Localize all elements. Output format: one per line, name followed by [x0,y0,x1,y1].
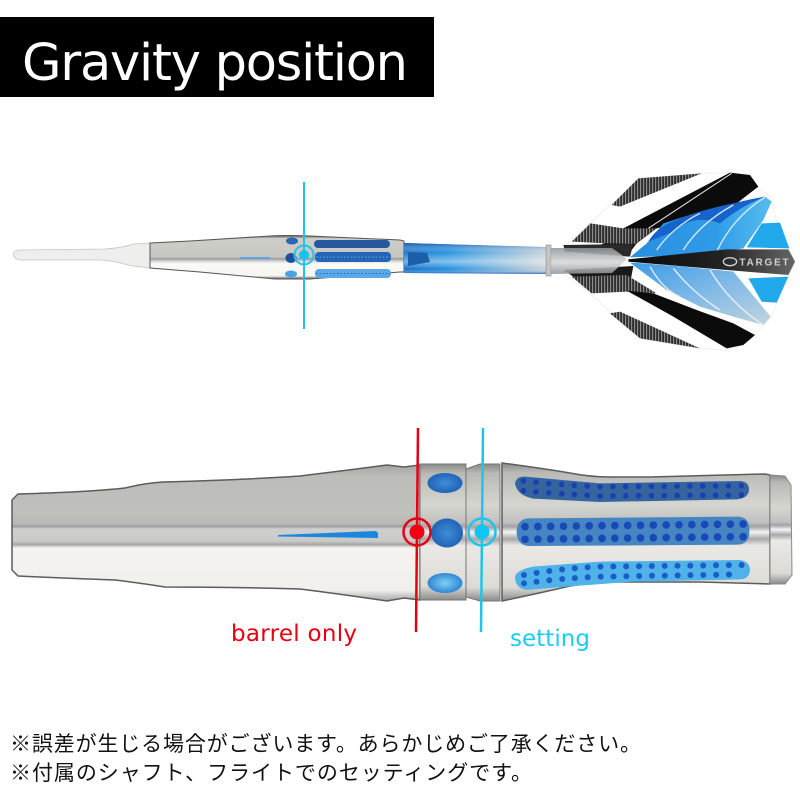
carbon lower mid strip [572,275,657,293]
small full dart [13,173,795,350]
carbon lower strip [610,312,700,348]
upper feathers [630,197,772,257]
large barrel close-up [12,463,792,601]
flight, drawn in 3x coordinates [560,173,795,350]
chevron band upper [563,244,633,257]
carbon upper strip [612,173,702,207]
chevron band lower [563,266,633,284]
lower feathers [630,263,771,325]
centre black strip [628,249,795,275]
footnote line 2: ※付属のシャフト、フライトでのセッティングです。 [10,762,532,785]
oval bottom [428,573,462,593]
shaft shine [404,243,546,274]
grip pits in 3x coordinates [515,477,750,590]
title [0,17,434,97]
shaft ring [546,245,551,276]
blue groove line [278,531,378,538]
oval top [428,473,462,493]
barrel only marker [404,428,430,632]
centre ring section [420,464,466,600]
grip section [502,463,770,601]
middle pit [517,517,749,546]
shaft [404,243,546,274]
label: setting: setting [510,626,590,652]
logo mark [723,258,737,266]
upper feather dark edge [648,197,765,242]
front barrel section [12,465,420,601]
black upper band [600,173,758,257]
bottom pit [515,560,750,590]
lower blue block [748,277,788,303]
dart tip [13,243,150,268]
small barrel grooves [240,238,391,278]
carbon mid strip [572,223,657,244]
upper blue block [747,223,789,248]
upper band white line [648,173,732,228]
flight body [560,173,795,350]
collar [466,464,500,601]
label: barrel only: barrel only [231,621,357,647]
upper feather veins [657,197,765,252]
black lower band [627,291,755,348]
footnotes [10,732,641,785]
setting marker [468,428,496,632]
small dart gravity marker [294,182,314,329]
top pit [515,477,749,502]
rear collar [770,475,792,584]
title: Gravity position [22,34,408,93]
shaft stem [551,248,626,274]
shaft logo [408,252,430,266]
lower feather veins [650,267,763,325]
small barrel [150,236,404,279]
footnote line 1: ※誤差が生じる場合がございます。あらかじめご了承ください。 [10,732,641,756]
TARGET logo text: TARGET [739,257,789,268]
oval middle [431,518,463,548]
